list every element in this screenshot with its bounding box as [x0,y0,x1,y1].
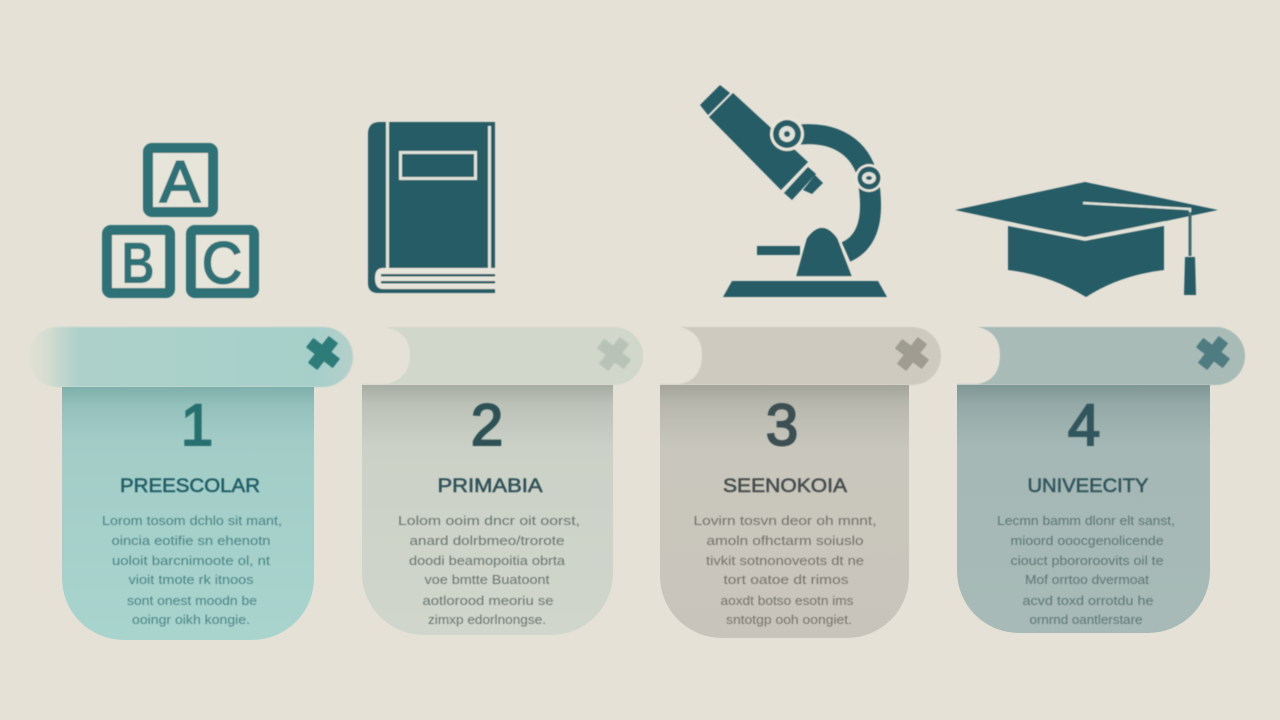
body text 2: anard dolrbmeo/trorote [410,533,564,548]
number 3: 3 [766,393,798,458]
panel: step 4 univeecity [957,327,1245,633]
upper joint [770,117,804,151]
body text 2: Lolom ooim dncr oit oorst, [398,513,580,528]
body text 1: sont onest moodn be [127,593,257,608]
icon: ABC blocks: A [160,150,200,215]
icon: ABC blocks: C [202,231,242,296]
body text 3: Lovirn tosvn deor oh mnnt, [694,513,876,528]
icon: ABC blocks [107,148,254,296]
microscope arm [795,134,868,178]
icon: x mark 1 [299,329,347,377]
number 2: 2 [471,393,503,458]
body text 1: Lorom tosom dchlo sit mant, [102,513,282,528]
body text 3: amoln ofhctarm soiuslo [706,533,864,548]
body text 4: acvd toxd orrotdu he [1022,593,1154,608]
body text 4: mioord ooocgenolicende [1010,533,1164,548]
heading 3: SEENOKOIA [723,476,847,497]
icon: graduation cap [955,182,1218,297]
panel: step 1 preescolar [28,327,353,640]
icon: ABC blocks: B [122,231,154,296]
icon: microscope [700,85,887,297]
number 4: 4 [1068,393,1100,458]
card body 2 [362,385,613,635]
body text 1 [102,513,282,627]
ribbon 4 [957,327,1245,385]
lower joint [855,164,883,192]
icon: x mark 3 [888,330,936,378]
body text 2: aotlorood meoriu se [422,593,554,608]
heading 4: UNIVEECITY [1028,476,1149,497]
body text 1: uoloit barcnimoote ol, nt [112,553,270,568]
microscope stand [795,227,853,277]
body text 4: ciouct pbororoovits oil te [1010,553,1164,568]
icon: book [368,122,495,293]
panel: step 2 primabia [362,327,643,635]
body text 3: aoxdt botso esotn ims [720,593,854,608]
number 1: 1 [181,393,213,458]
body text 3: sntotgp ooh oongiet. [726,612,852,627]
body text 2 [398,513,580,627]
body text 1: oincia eotifie sn ehenotn [112,533,270,548]
body text 3: tivkit sotnonoveots dt ne [706,553,864,568]
card body 3 [660,385,909,638]
body text 4: Lecmn bamm dlonr elt sanst, [997,513,1175,528]
card body 4 [957,385,1210,633]
body text 2: doodi beamopoitia obrta [409,553,566,568]
body text 4 [997,513,1175,627]
body text 2: zimxp edorlnongse. [428,612,546,627]
icon: x mark 4 [1189,329,1237,377]
body text 4: Mof orrtoo dvermoat [1025,572,1149,587]
ribbon 3 [660,327,941,385]
heading 2: PRIMABIA [438,476,543,497]
body text 2: voe bmtte Buatoont [424,572,550,587]
body text 3: tort oatoe dt rimos [724,572,849,587]
icon: x mark 2 [590,330,638,378]
body text 3 [694,513,876,627]
body text 1: vioit tmote rk itnoos [128,572,254,587]
panel: step 3 seenokoia [660,327,941,638]
heading 1: PREESCOLAR [120,476,260,497]
body text 4: ornrnd oantlerstare [1030,612,1142,627]
body text 1: ooingr oikh kongie. [132,612,250,627]
ribbon 1 [28,327,353,387]
card body 1 [62,387,314,640]
microscope tube [709,93,808,190]
ribbon 2 [362,327,643,385]
